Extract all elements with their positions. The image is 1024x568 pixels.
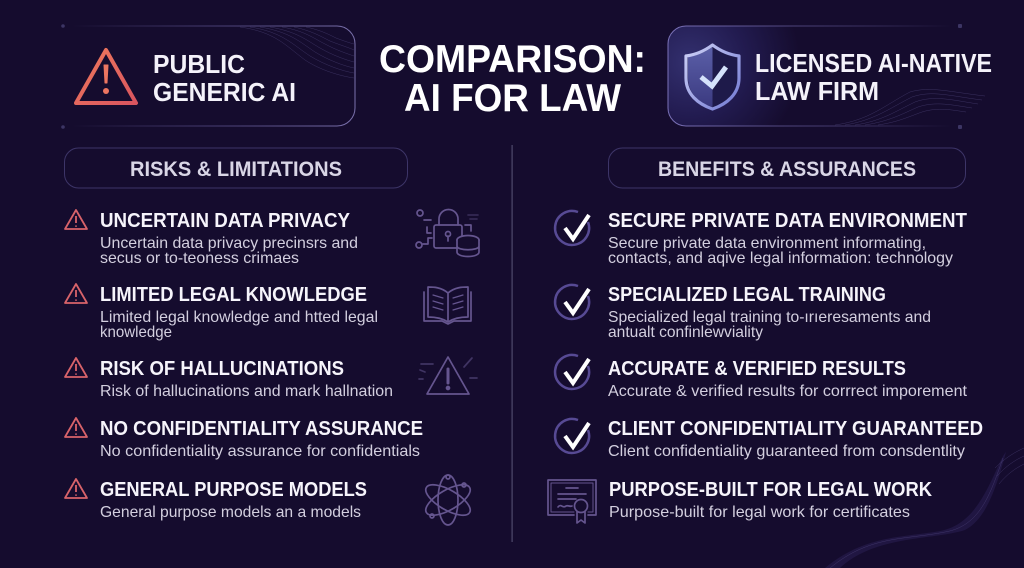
title <box>379 38 646 120</box>
benefit text: Purpose-built for legal work for certificates <box>609 504 910 521</box>
warning icon <box>65 358 87 377</box>
benefit text <box>608 284 931 341</box>
risk text: General purpose models an a models <box>100 504 361 521</box>
risk text: NO CONFIDENTIALITY ASSURANCE <box>100 418 423 440</box>
icon: warning triangle <box>76 50 136 103</box>
benefits list <box>548 210 983 523</box>
panel label: GENERIC AI <box>153 77 296 107</box>
check icon <box>555 355 589 389</box>
icon: open book <box>424 287 471 324</box>
panel wave lines <box>240 27 354 78</box>
benefit text: Specialized legal training to-ırıeresaments and <box>608 309 931 326</box>
benefit: accurate and verified <box>555 355 968 400</box>
corner dots <box>958 24 962 129</box>
risk text: Uncertain data privacy precinsrs and <box>100 235 358 252</box>
panel label: PUBLIC <box>153 49 245 79</box>
panel: licensed AI-native law firm <box>668 24 992 129</box>
panel label <box>755 48 992 106</box>
panel: public generic AI <box>61 24 355 129</box>
risk: uncertain data privacy <box>65 210 358 267</box>
center divider <box>512 145 513 542</box>
panel wave lines <box>835 89 985 125</box>
benefit text: ACCURATE & VERIFIED RESULTS <box>608 358 906 380</box>
risk text <box>100 418 423 460</box>
icon: shield with check <box>686 45 739 109</box>
risks list <box>65 210 423 521</box>
risk: no confidentiality assurance <box>65 418 423 460</box>
benefit text <box>608 210 967 267</box>
risk text <box>100 479 367 521</box>
check icon <box>555 285 589 319</box>
benefit: specialized legal training <box>555 284 931 341</box>
panel label: LAW FIRM <box>755 76 879 106</box>
risk text: No confidentiality assurance for confidentials <box>100 443 420 460</box>
benefit text <box>609 479 933 521</box>
icon: certificate <box>548 480 596 523</box>
section heading: benefits and assurances: BENEFITS & ASSURANCES <box>658 158 916 181</box>
risk text: Limited legal knowledge and htted legal <box>100 309 378 326</box>
risk text: knowledge <box>100 324 172 341</box>
icon: atom <box>421 475 475 525</box>
benefit text: Client confidentiality guaranteed from consdentlity <box>608 443 965 460</box>
benefit text: PURPOSE-BUILT FOR LEGAL WORK <box>609 479 933 501</box>
benefit text: SPECIALIZED LEGAL TRAINING <box>608 284 886 306</box>
warning icon <box>65 284 87 303</box>
risk text: secus or to-teoness crimaes <box>100 250 299 267</box>
benefit text: SECURE PRIVATE DATA ENVIRONMENT <box>608 210 967 232</box>
corner dots <box>61 24 65 129</box>
icon: warning with signals <box>419 357 477 394</box>
risk: limited legal knowledge <box>65 284 378 341</box>
benefit: secure private data <box>555 210 967 267</box>
benefit text <box>608 418 983 460</box>
warning icon <box>65 479 87 498</box>
title: AI FOR LAW <box>404 77 621 120</box>
benefit text: Secure private data environment informating, <box>608 235 926 252</box>
title: COMPARISON: <box>379 38 646 81</box>
panel frame <box>72 26 355 126</box>
risk text <box>100 284 378 341</box>
benefit: purpose-built <box>548 479 933 523</box>
risk text: Risk of hallucinations and mark hallnation <box>100 383 393 400</box>
benefit text: contacts, and aqive legal information: technology <box>608 250 953 267</box>
warning icon <box>65 210 87 229</box>
warning icon <box>65 418 87 437</box>
section heading: benefits and assurances <box>608 148 966 188</box>
decorative wave: bottom right corner <box>825 448 1024 568</box>
benefit text: CLIENT CONFIDENTIALITY GUARANTEED <box>608 418 983 440</box>
section heading: risks and limitations: RISKS & LIMITATIONS <box>130 158 342 181</box>
risk text: RISK OF HALLUCINATIONS <box>100 358 344 380</box>
risk: general purpose models <box>65 479 367 521</box>
benefit: client confidentiality <box>555 418 983 460</box>
panel frame <box>668 26 952 126</box>
icon: padlock with database <box>416 210 479 256</box>
risk: hallucinations <box>65 358 393 400</box>
risk text: GENERAL PURPOSE MODELS <box>100 479 367 501</box>
risk text: UNCERTAIN DATA PRIVACY <box>100 210 351 232</box>
section heading: risks and limitations <box>64 148 408 188</box>
benefit text: Accurate & verified results for corrrect imporement <box>608 383 968 400</box>
benefit text <box>608 358 968 400</box>
panel label: LICENSED AI-NATIVE <box>755 48 992 78</box>
risk text <box>100 210 358 267</box>
risk text <box>100 358 393 400</box>
check icon <box>555 211 589 245</box>
benefit text: antualt confinlewviality <box>608 324 763 341</box>
check icon <box>555 419 589 453</box>
panel label <box>153 49 296 107</box>
risk text: LIMITED LEGAL KNOWLEDGE <box>100 284 367 306</box>
